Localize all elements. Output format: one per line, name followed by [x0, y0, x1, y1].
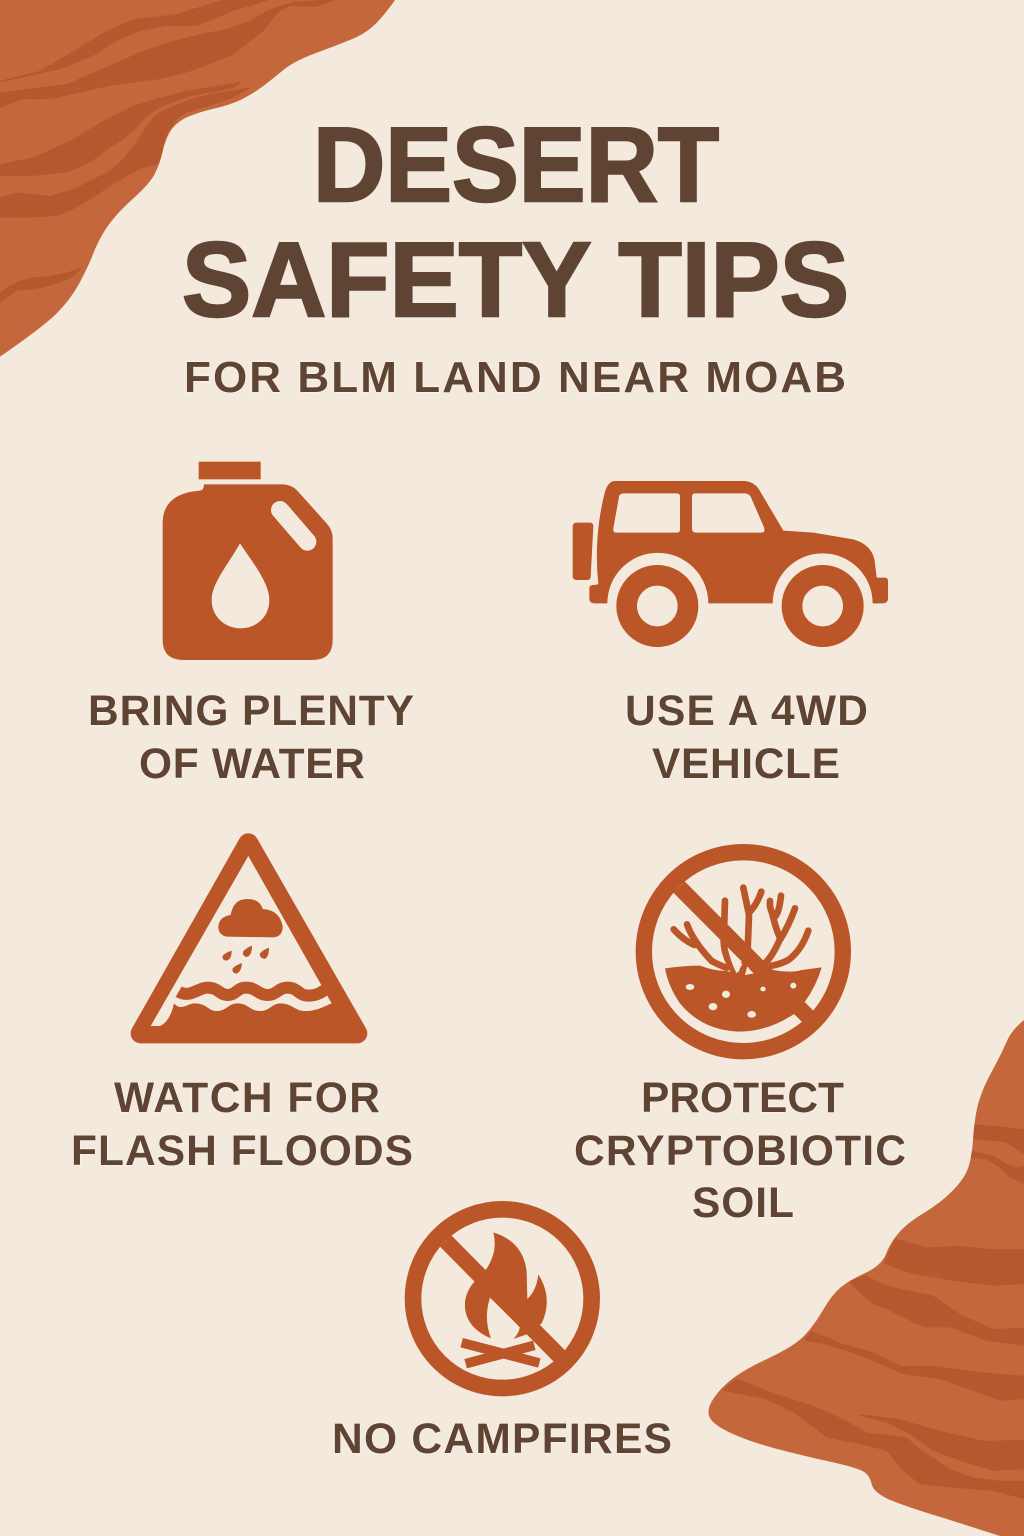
label: use a 4WD vehicle: VEHICLE: [652, 741, 840, 788]
panel: 4WD vehicle: [573, 481, 888, 788]
label: bring plenty of water: OF WATER: [139, 741, 365, 788]
subtitle: FOR BLM LAND NEAR MOAB: [184, 353, 846, 402]
label: watch for flash floods: WATCH FOR: [114, 1075, 380, 1122]
label: protect cryptobiotic soil: SOIL: [692, 1180, 794, 1227]
icon: water jug with drop: [163, 462, 333, 660]
panel: cryptobiotic soil: [574, 852, 906, 1227]
label: protect cryptobiotic soil: PROTECT: [641, 1075, 844, 1122]
label: use a 4WD vehicle: [625, 688, 868, 788]
panel: no campfires: [332, 1209, 672, 1463]
label: protect cryptobiotic soil: [574, 1075, 906, 1227]
title: [182, 106, 849, 339]
icon: no stepping on cryptobiotic soil: [644, 852, 843, 1051]
label: bring plenty of water: BRING PLENTY: [88, 688, 414, 735]
label: watch for flash floods: FLASH FLOODS: [71, 1128, 413, 1175]
title: SAFETY TIPS: [182, 221, 849, 339]
label: bring plenty of water: [88, 688, 414, 788]
icon: flash flood warning triangle: [141, 843, 357, 1033]
decoration: bottom-right sandstone rock: [700, 1020, 1024, 1536]
label: no campfires: NO CAMPFIRES: [332, 1416, 672, 1463]
label: use a 4WD vehicle: USE A 4WD: [625, 688, 868, 735]
panel: bring water: [88, 462, 414, 788]
icon: no campfire sign: [413, 1209, 592, 1388]
label: protect cryptobiotic soil: CRYPTOBIOTIC: [574, 1128, 906, 1175]
panel: flash floods: [71, 843, 413, 1175]
decoration: top-left sandstone rock: [0, 0, 400, 360]
icon: 4WD jeep: [573, 481, 888, 637]
label: watch for flash floods: [71, 1075, 413, 1175]
title: DESERT: [313, 106, 719, 224]
